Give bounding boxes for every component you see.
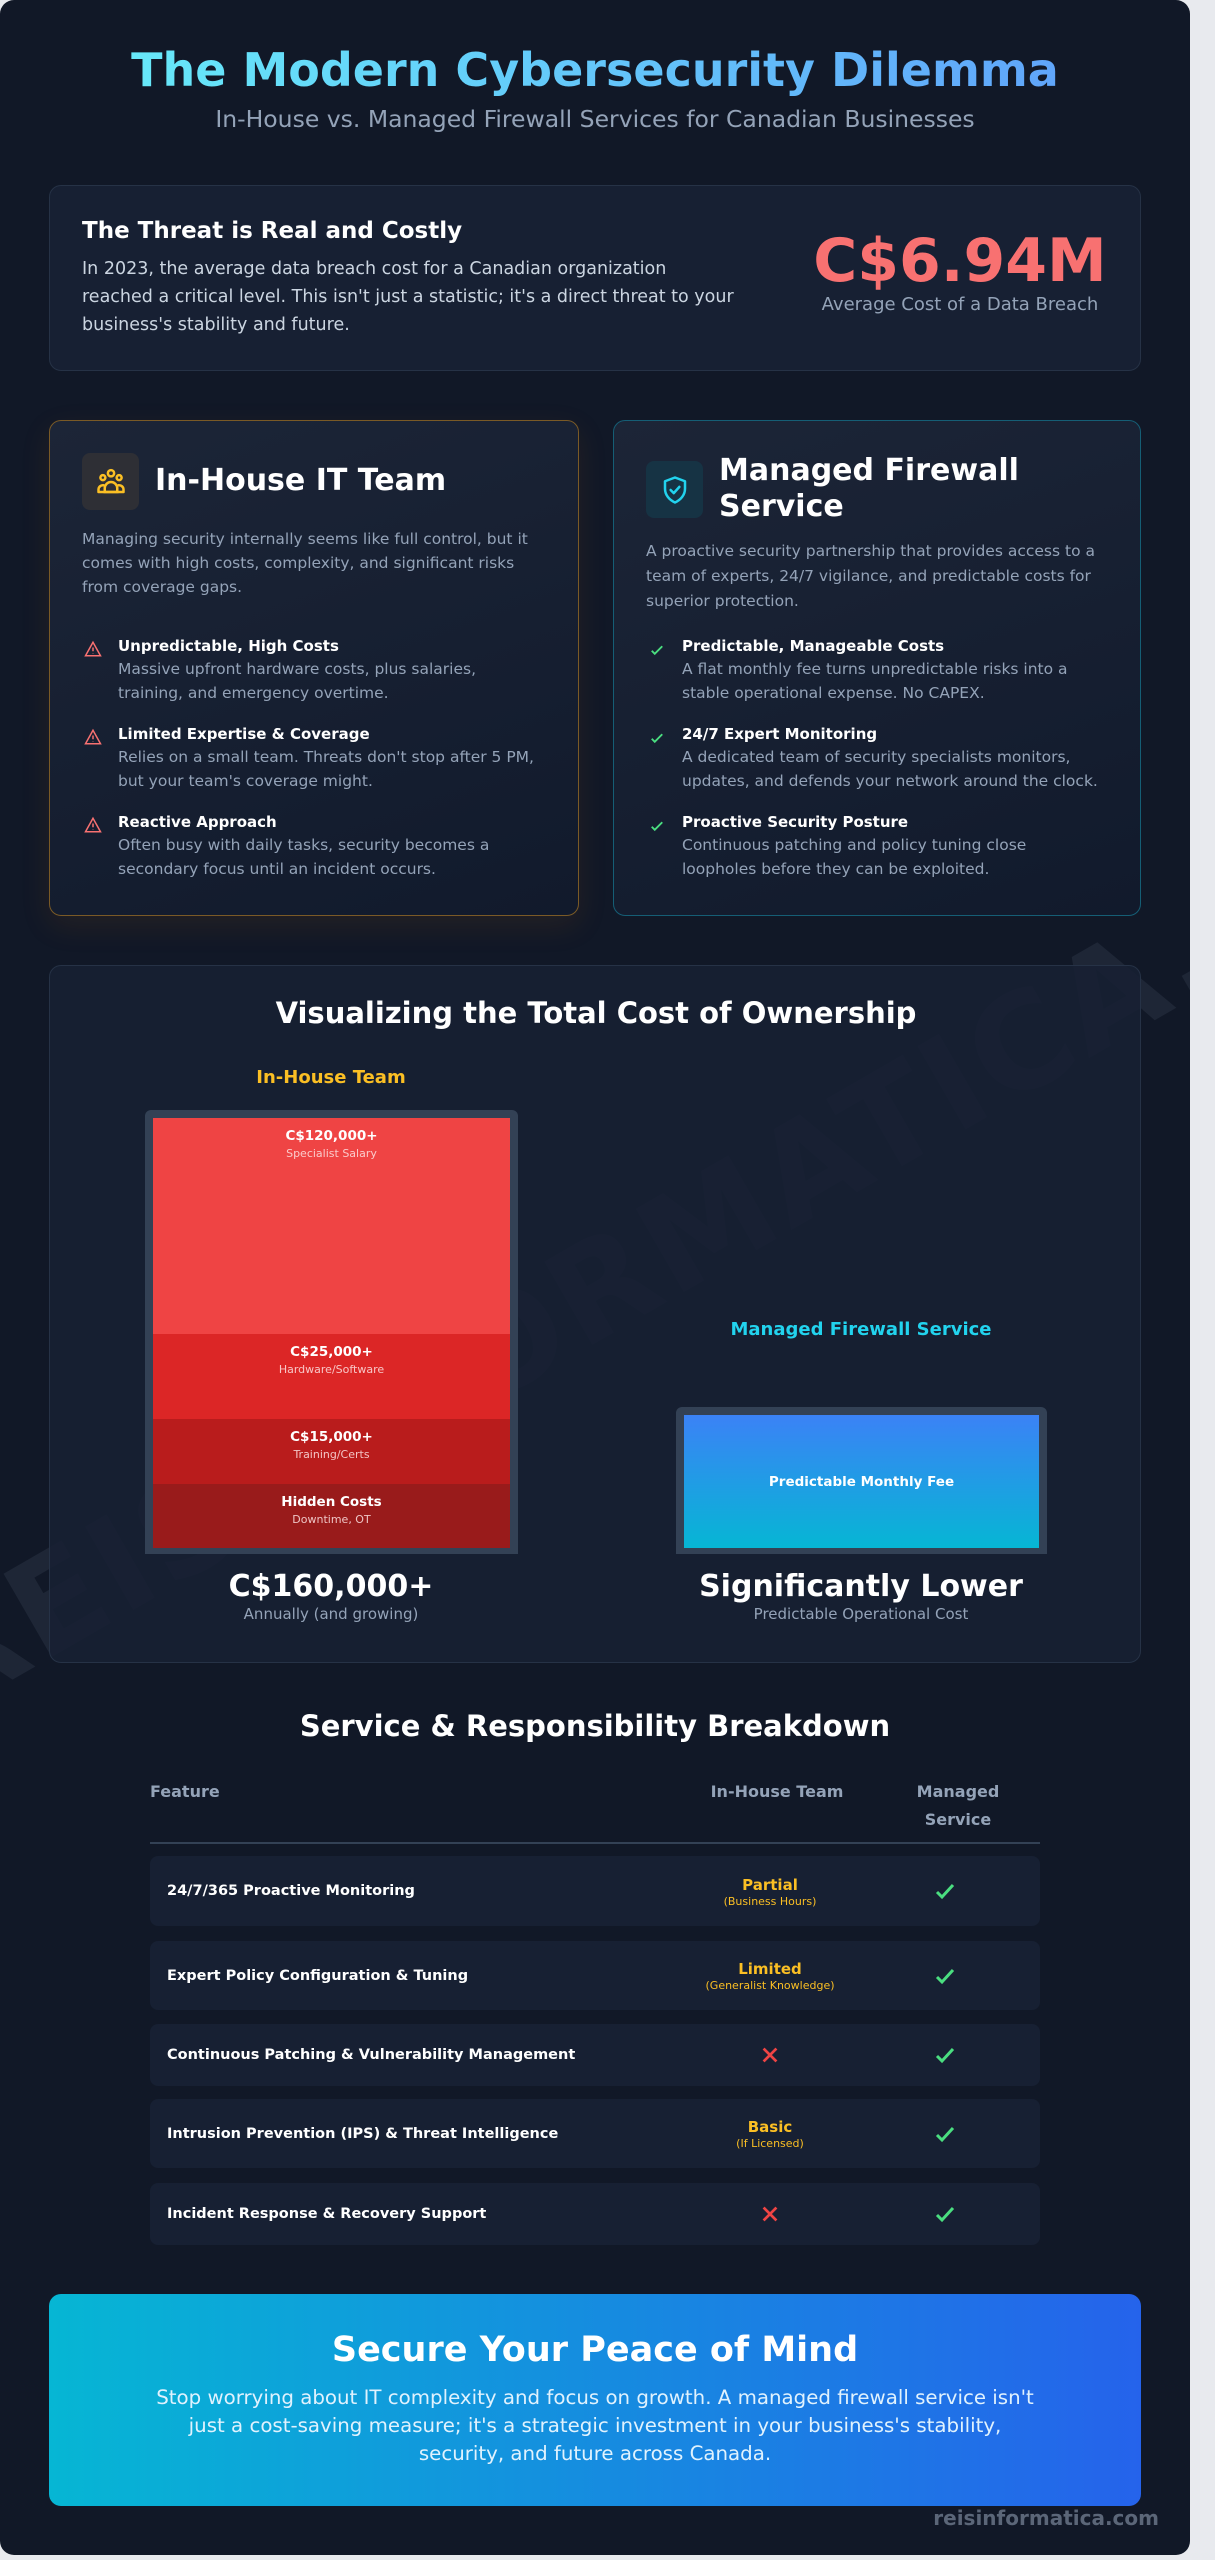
segment: hardware: C$25,000+ — [290, 1344, 373, 1360]
segment: salary: C$120,000+ — [285, 1128, 378, 1144]
item: reactive — [84, 813, 489, 878]
item list — [651, 637, 1098, 878]
icon: shield — [646, 461, 703, 518]
panel: TCO chart — [49, 965, 1141, 1663]
threat text: business's stability and future. — [82, 315, 350, 335]
icon: team — [82, 453, 139, 510]
CTA heading: Secure Your Peace of Mind — [332, 2330, 858, 2370]
segment: hidden — [153, 1484, 510, 1548]
row: IPS: Basic — [748, 2118, 792, 2136]
segment: training — [153, 1419, 510, 1484]
description: Managing security internally seems like full control, but it comes with high costs, complexity, and significant risks from coverage gaps. — [82, 530, 528, 596]
row: incident — [150, 2183, 1040, 2245]
CTA text: just a cost-saving measure; it's a strategic investment in your business's stability, — [189, 2414, 1001, 2437]
item: proactive: Continuous patching and policy tuning close loopholes before they can be exploited. — [682, 836, 1026, 878]
stat: breach cost: Average Cost of a Data Breach — [822, 294, 1098, 315]
item: costs — [84, 637, 476, 702]
item: monitoring: A dedicated team of security specialists monitors, updates, and defends your network around the clock. — [682, 748, 1098, 790]
item: monitoring — [651, 725, 1098, 790]
heading: managed — [719, 453, 1019, 524]
CTA banner — [49, 2294, 1141, 2506]
row: patching — [150, 2024, 1040, 2086]
panel: managed — [613, 420, 1141, 916]
segment: salary: Specialist Salary — [286, 1147, 377, 1160]
segment: training: Training/Certs — [293, 1448, 370, 1461]
item: expertise: Limited Expertise & Coverage — [118, 725, 370, 743]
total: managed: Significantly Lower — [699, 1569, 1023, 1604]
heading: managed: Managed Firewall — [719, 453, 1019, 488]
row: IPS: Intrusion Prevention (IPS) & Threat Intelligence — [167, 2126, 558, 2142]
segment: hardware — [153, 1334, 510, 1419]
CTA text: security, and future across Canada. — [419, 2442, 771, 2465]
item list — [84, 637, 534, 878]
item: predictable — [651, 637, 1068, 702]
bar: managed — [676, 1407, 1047, 1554]
row: IPS — [150, 2099, 1040, 2168]
threat text — [82, 259, 734, 335]
item: predictable: Predictable, Manageable Costs — [682, 637, 944, 655]
total: in-house — [229, 1569, 433, 1623]
item: expertise — [84, 725, 534, 790]
row: monitoring: Partial — [742, 1876, 798, 1894]
threat text: In 2023, the average data breach cost for a Canadian organization — [82, 259, 666, 279]
CTA text — [156, 2386, 1034, 2465]
row: patching: Continuous Patching & Vulnerability Management — [167, 2047, 575, 2063]
row: policy: (Generalist Knowledge) — [706, 1979, 834, 1992]
heading: in-house: In-House IT Team — [155, 463, 446, 498]
item: costs: Unpredictable, High Costs — [118, 637, 339, 655]
segment: hidden: Downtime, OT — [292, 1513, 371, 1526]
table header: Managed Service — [917, 1782, 999, 1829]
row: IPS: (If Licensed) — [736, 2137, 804, 2150]
item: reactive: Reactive Approach — [118, 813, 277, 831]
stat: breach cost: C$6.94M — [813, 226, 1107, 296]
footer brand: reisinformatica.com — [933, 2506, 1159, 2530]
row: policy: Expert Policy Configuration & Tuning — [167, 1968, 468, 1984]
heading: managed: Service — [719, 489, 844, 524]
row: policy: Limited — [738, 1960, 802, 1978]
total: managed — [699, 1569, 1023, 1623]
title: The Modern Cybersecurity Dilemma — [131, 43, 1059, 97]
row: monitoring: (Business Hours) — [724, 1894, 816, 1908]
item: monitoring: 24/7 Expert Monitoring — [682, 725, 877, 743]
stacked bar: in-house — [145, 1110, 518, 1554]
table — [150, 1782, 1040, 1844]
label: managed: Managed Firewall Service — [730, 1319, 992, 1340]
label: in-house: In-House Team — [256, 1067, 406, 1088]
row: monitoring — [150, 1856, 1040, 1926]
item: reactive: Often busy with daily tasks, security becomes a secondary focus until an incident occurs. — [118, 836, 489, 878]
total: in-house: C$160,000+ — [229, 1569, 433, 1604]
panel: in-house — [49, 420, 579, 916]
threat text: reached a critical level. This isn't just a statistic; it's a direct threat to your — [82, 287, 734, 307]
CTA text: Stop worrying about IT complexity and focus on growth. A managed firewall service isn't — [156, 2386, 1034, 2409]
item: proactive: Proactive Security Posture — [682, 813, 908, 831]
subtitle: In-House vs. Managed Firewall Services for Canadian Businesses — [215, 105, 975, 133]
table header — [150, 1770, 1040, 1844]
item: expertise: Relies on a small team. Threats don't stop after 5 PM, but your team's coverage might. — [118, 748, 534, 790]
table heading: Service & Responsibility Breakdown — [300, 1709, 890, 1743]
item: costs: Massive upfront hardware costs, plus salaries, training, and emergency overtime. — [118, 660, 476, 702]
bar: managed: Predictable Monthly Fee — [769, 1474, 954, 1490]
row: incident: Incident Response & Recovery Support — [167, 2206, 486, 2222]
segment: hidden: Hidden Costs — [281, 1494, 382, 1510]
panel: threat — [49, 185, 1141, 371]
row: monitoring: 24/7/365 Proactive Monitoring — [167, 1883, 415, 1899]
description: A proactive security partnership that provides access to a team of experts, 24/7 vigilance, and predictable costs for superior protection. — [646, 542, 1095, 610]
chart heading: Visualizing the Total Cost of Ownership — [276, 996, 916, 1030]
row: policy — [150, 1941, 1040, 2010]
total: in-house: Annually (and growing) — [244, 1605, 418, 1623]
item: predictable: A flat monthly fee turns unpredictable risks into a stable operational expense. No CAPEX. — [682, 660, 1068, 702]
segment: salary — [153, 1118, 510, 1334]
table header: In-House Team — [711, 1782, 843, 1801]
item: proactive — [651, 813, 1026, 878]
threat heading: The Threat is Real and Costly — [82, 218, 462, 244]
segment: hardware: Hardware/Software — [279, 1363, 384, 1376]
segment: training: C$15,000+ — [290, 1429, 373, 1445]
table header: Feature — [150, 1782, 220, 1801]
total: managed: Predictable Operational Cost — [754, 1605, 968, 1623]
